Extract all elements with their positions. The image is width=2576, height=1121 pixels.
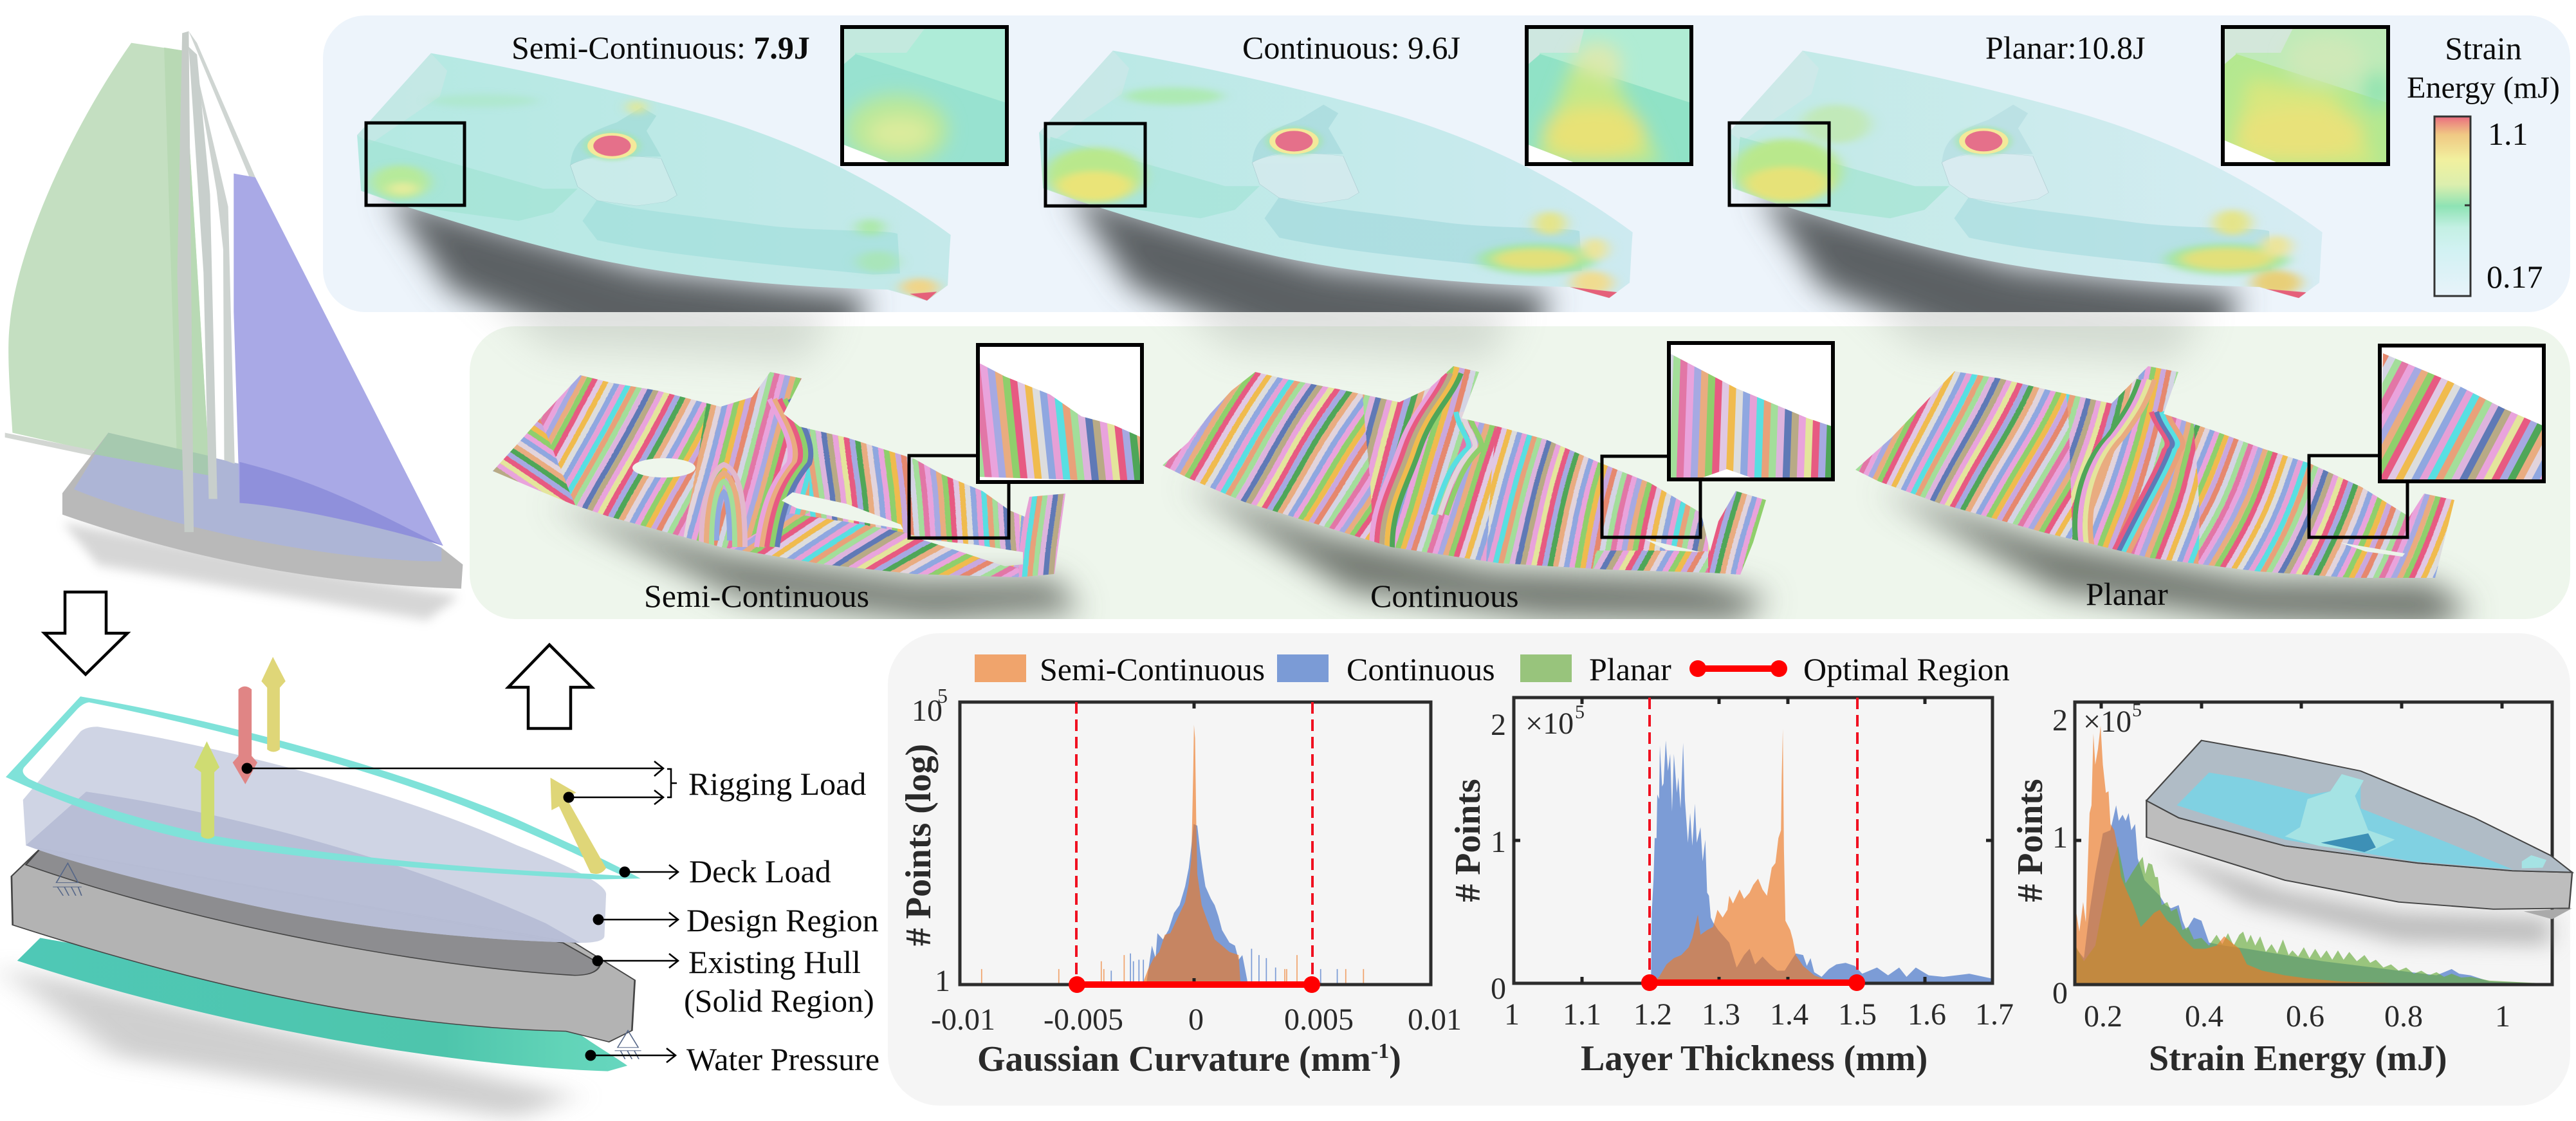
bow stripes — [1708, 483, 1772, 579]
left corner stripes — [476, 412, 579, 515]
jib lower shade — [239, 462, 443, 546]
red rigging arrow — [233, 687, 257, 784]
y ticks: 5 — [937, 684, 948, 707]
x ticks: -0.005 — [1044, 1003, 1123, 1037]
inset frame — [842, 27, 1007, 164]
bow foam — [2522, 855, 2546, 868]
swirl left — [2075, 380, 2155, 553]
right stripes — [1486, 418, 1711, 579]
x ticks: -0.01 — [931, 1003, 995, 1037]
layers: planar — [1846, 354, 2464, 586]
layer inset: continuous — [1643, 343, 1862, 485]
y ticks: 1 — [1491, 825, 1506, 859]
x ticks: 0.01 — [1408, 1003, 1462, 1037]
layer detail box: planar — [2309, 456, 2407, 537]
inset diagonal band — [1527, 54, 1691, 164]
caption: continuous: Continuous — [1370, 578, 1519, 614]
boss — [570, 156, 677, 206]
foam fill — [2176, 773, 2512, 869]
lower band — [582, 199, 900, 275]
inset frame — [1527, 27, 1691, 164]
x ticks: 1.4 — [1770, 997, 1808, 1032]
hull deck — [74, 432, 441, 561]
y axis title: # Points — [1448, 779, 1488, 902]
design region lower shade — [26, 792, 580, 943]
water pressure sheet — [17, 938, 627, 1071]
legend title: Strain — [2445, 30, 2522, 66]
hull body — [357, 53, 951, 301]
right upper stripes — [772, 393, 1081, 553]
x ticks — [1504, 997, 2014, 1032]
swatch: optimal region — [1689, 660, 1787, 677]
panel: printed layer slices — [470, 326, 2570, 619]
y ticks: 1 — [2052, 820, 2068, 855]
y axis title: # Points — [2010, 779, 2050, 902]
label: rigging load: Rigging Load — [688, 766, 866, 802]
legend label: continuous: Continuous — [1347, 651, 1495, 687]
x ticks: 1 — [2495, 999, 2510, 1033]
inset heat — [2229, 37, 2390, 164]
detail box: continuous hull — [1045, 124, 1145, 206]
middle stripes — [2059, 360, 2200, 566]
inset shadow — [2152, 846, 2550, 946]
heat spots — [1733, 105, 2301, 295]
swatch: continuous — [1277, 654, 1329, 682]
strain hull shadows — [374, 194, 2257, 312]
mast neck — [1252, 105, 1343, 163]
stress ring — [1955, 126, 2012, 156]
sailboat shadow — [62, 523, 459, 620]
layer shadows — [547, 483, 2470, 627]
inset white corner — [842, 144, 894, 164]
inset heat — [845, 95, 948, 165]
exponent label: 5 — [1575, 701, 1585, 723]
side band — [1045, 137, 1260, 218]
x ticks: 1 — [1504, 997, 1520, 1032]
x ticks: 1.7 — [1975, 997, 2014, 1032]
inset stripes — [2354, 346, 2573, 487]
hull side — [62, 432, 463, 589]
optimal region — [1069, 976, 1320, 993]
sailboat illustration — [5, 31, 463, 620]
histogram bars — [982, 725, 1363, 984]
swirl right — [1433, 412, 1482, 515]
optimal bounds — [1650, 698, 1857, 983]
keel — [2524, 908, 2572, 919]
inset white ground — [2380, 346, 2544, 481]
y ticks: 2 — [1491, 708, 1506, 742]
label: solid region: (Solid Region) — [684, 983, 874, 1019]
side band — [1735, 137, 1949, 218]
y axis title: # Points (log) — [899, 744, 939, 946]
hull: semi-continuous strain — [357, 53, 951, 301]
yellow oblique rigging arrow — [550, 778, 606, 874]
swatch: semi-continuous — [975, 654, 1026, 682]
legend label: optimal region: Optimal Region — [1803, 651, 2010, 687]
existing hull cavity — [26, 849, 600, 976]
bow wall — [1039, 51, 1129, 141]
swirl left — [701, 465, 745, 547]
layers: semi-continuous — [476, 360, 1081, 592]
scale max: 1.1 — [2488, 116, 2528, 152]
chart: gaussian curvature — [899, 684, 1462, 1079]
x ticks: 0.005 — [1284, 1003, 1354, 1037]
lower band — [1954, 197, 2272, 272]
layer inset: semi-continuous — [952, 345, 1171, 486]
middle stripes — [1364, 354, 1544, 579]
faint hull shadows outside blue panel — [450, 257, 2207, 360]
x axis title: Layer Thickness (mm) — [1581, 1039, 1927, 1079]
inset diagonal band — [2223, 54, 2388, 164]
optimal bounds — [1076, 702, 1312, 985]
y ticks: 10 — [912, 694, 943, 728]
y ticks: 2 — [2052, 703, 2068, 737]
inset white corner — [2223, 140, 2281, 164]
x ticks: 1.2 — [1633, 997, 1672, 1032]
swirl right — [757, 399, 811, 547]
rear mast stays — [194, 59, 235, 464]
chart: strain energy — [2010, 699, 2572, 1079]
x ticks: 0.8 — [2384, 999, 2423, 1033]
colour scale — [2434, 116, 2470, 296]
inset background — [1527, 27, 1691, 164]
inset frame — [978, 345, 1142, 482]
mast neck — [570, 107, 661, 165]
bow post stripes — [1023, 483, 1081, 586]
side band — [363, 140, 578, 221]
inset white ground — [978, 345, 1142, 482]
inset wall — [842, 27, 926, 66]
hull body — [1729, 51, 2323, 298]
inset background — [842, 27, 1007, 164]
label: deck load: Deck Load — [689, 853, 831, 889]
yellow rigging arrow rear — [261, 657, 286, 752]
mast neck — [1942, 105, 2033, 163]
inset frame — [1669, 343, 1833, 479]
title: continuous energy: Continuous: 9.6J — [1242, 30, 1460, 66]
exponent label: ×10 — [1525, 707, 1574, 741]
exponent label: 5 — [2132, 699, 2142, 721]
arrow: sail to load model — [44, 592, 127, 674]
stress ring — [1265, 126, 1323, 156]
deck load ring — [6, 696, 641, 880]
x ticks: 0 — [1188, 1003, 1204, 1037]
y ticks — [1491, 708, 1506, 1006]
inset: planar strain — [2223, 27, 2390, 164]
optimal region — [1641, 974, 1865, 991]
left support symbol — [53, 863, 82, 896]
bow tip stress — [910, 292, 937, 301]
legend title second line: Energy (mJ) — [2407, 71, 2560, 105]
histogram bars — [2075, 726, 2550, 984]
base stripes — [1846, 354, 2464, 586]
x ticks: 1.6 — [1908, 997, 1946, 1032]
existing hull outer — [12, 849, 635, 1042]
inset stripes — [952, 345, 1171, 486]
panel: histograms — [888, 633, 2570, 1106]
caption: planar: Planar — [2086, 576, 2168, 612]
stress ring — [584, 131, 641, 161]
inset white ground — [1669, 343, 1833, 479]
layer detail box: continuous — [1602, 456, 1700, 537]
hull side — [2146, 801, 2572, 909]
middle stay — [189, 47, 217, 499]
base stripes — [1152, 354, 1782, 586]
heat spots — [1045, 88, 1612, 295]
caption: semi-continuous: Semi-Continuous — [644, 578, 869, 614]
x ticks: 1.3 — [1702, 997, 1740, 1032]
base stripes — [476, 360, 1081, 592]
x ticks — [931, 1003, 1462, 1037]
swirl left — [1372, 373, 1461, 566]
y ticks: 0 — [1491, 972, 1506, 1006]
x axis title: ) — [1389, 1039, 1401, 1079]
x ticks: 0.4 — [2185, 999, 2223, 1033]
rigging load leaders — [247, 761, 678, 1062]
swirl right — [2113, 412, 2183, 553]
scale min: 0.17 — [2487, 259, 2543, 295]
bow tip stress — [2254, 288, 2306, 299]
legend label: planar: Planar — [1589, 651, 1671, 687]
solid hull inset — [2146, 741, 2572, 946]
leader dots — [242, 763, 630, 1061]
x ticks — [2084, 999, 2510, 1033]
deck green tint — [93, 432, 210, 476]
forestay — [189, 31, 255, 178]
inset: continuous strain — [1527, 27, 1691, 164]
inset frame — [2380, 346, 2544, 481]
detail box: planar hull — [1729, 123, 1829, 205]
x ticks: 1.5 — [1838, 997, 1877, 1032]
swatch: planar — [1520, 654, 1572, 682]
bow tip stress — [1570, 287, 1619, 298]
main sail — [8, 43, 210, 477]
x axis title: Strain Energy (mJ) — [2149, 1039, 2447, 1079]
x ticks: 0.2 — [2084, 999, 2122, 1033]
design region body — [23, 727, 606, 943]
inset diagonal band — [842, 54, 1007, 164]
inset frame — [2223, 27, 2388, 164]
histogram bars — [1651, 729, 1991, 983]
exponent label: ×10 — [2083, 705, 2131, 739]
histogram legend — [975, 651, 2010, 687]
legend label: semi-continuous: Semi-Continuous — [1040, 651, 1265, 687]
lower band stripes — [708, 515, 1029, 592]
mast boss stripes — [682, 360, 811, 560]
detail box: semi-continuous hull — [366, 123, 465, 205]
lower band — [1264, 197, 1582, 272]
lower right stripes — [1589, 553, 1737, 586]
boom — [5, 432, 93, 456]
inset white corner — [1527, 144, 1578, 164]
leader lines and labels — [242, 761, 879, 1077]
plot frame — [2075, 702, 2552, 985]
yellow-green deck arrow — [194, 741, 219, 839]
foam shade — [2321, 833, 2376, 852]
bow wall — [1729, 51, 1819, 141]
colour bar legend — [2407, 30, 2560, 296]
bow wall — [357, 53, 447, 144]
heat spots — [371, 95, 939, 297]
title: semi-continuous energy: Semi-Continuous: 7.9J — [511, 30, 810, 66]
arrow: load model to results — [508, 645, 592, 728]
exploded hull load model — [0, 657, 641, 1118]
title: planar energy: Planar:10.8J — [1985, 30, 2146, 66]
panel: strain energy maps — [323, 15, 2570, 312]
layer detail box: semi-continuous — [909, 456, 1009, 538]
foam boss — [2285, 774, 2395, 852]
x axis title: Gaussian Curvature (mm — [977, 1039, 1371, 1079]
x ticks: 1.1 — [1563, 997, 1601, 1032]
ground shadow — [0, 965, 575, 1118]
label: design region: Design Region — [686, 902, 879, 938]
mast — [178, 31, 194, 532]
inset: semi-continuous strain — [842, 27, 1007, 165]
inset stripes — [1643, 343, 1862, 485]
boss — [1942, 153, 2048, 203]
y ticks — [2052, 703, 2068, 1010]
hull: planar strain — [1729, 51, 2323, 299]
label: existing hull: Existing Hull — [688, 944, 861, 980]
layer inset: planar — [2354, 346, 2573, 487]
hull body — [1039, 51, 1633, 298]
y ticks — [912, 684, 950, 998]
label: water pressure: Water Pressure — [686, 1041, 879, 1077]
hull: continuous strain — [1039, 51, 1633, 298]
plot frame — [960, 702, 1431, 985]
main sail shaded strip — [164, 48, 210, 477]
inset background — [2223, 27, 2388, 164]
y ticks: 0 — [2052, 976, 2068, 1010]
inset wall — [1527, 27, 1585, 66]
jib sail — [234, 174, 443, 546]
x ticks: 0.6 — [2286, 999, 2324, 1033]
chart: layer thickness — [1448, 698, 2014, 1079]
boss — [1252, 153, 1359, 203]
x axis title: -1 — [1371, 1039, 1389, 1063]
right support symbol — [615, 1030, 641, 1059]
inset wall — [2223, 27, 2294, 66]
inset heat — [1533, 42, 1662, 164]
plot frame — [1514, 698, 1992, 983]
hull interior — [2146, 741, 2572, 873]
y ticks: 1 — [935, 964, 950, 998]
layers: continuous — [1152, 354, 1782, 586]
